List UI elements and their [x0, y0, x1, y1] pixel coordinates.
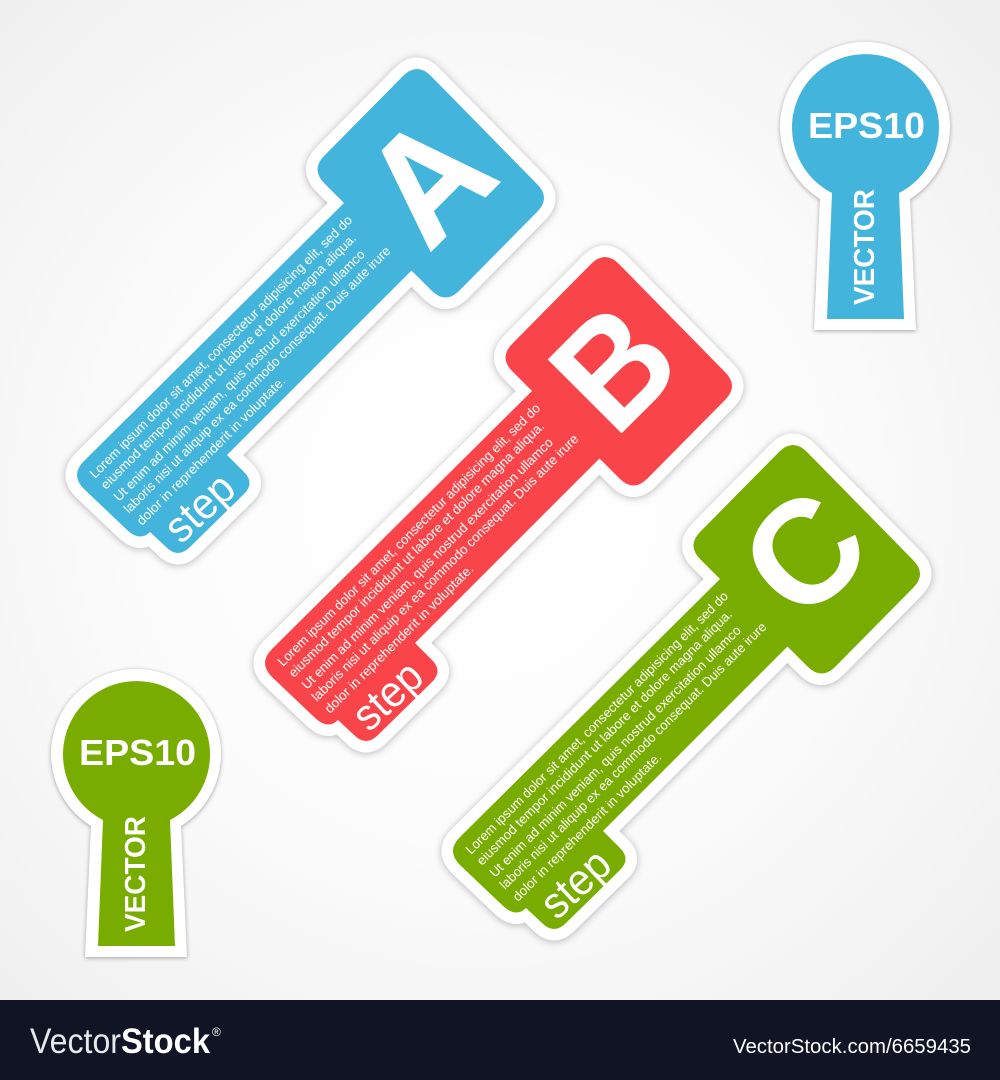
badge label VECTOR: VECTOR — [849, 189, 881, 305]
badge label EPS10: EPS10 — [808, 105, 925, 146]
footer url: VectorStock.com/6659435 — [733, 1036, 971, 1058]
body text B: laboris nisi ut aliquip ex ea commodo consequat. Duis aute irure — [309, 431, 581, 704]
key shape: green — [453, 445, 920, 929]
body text B: Ut enim ad minim veniam, quis nostrud exercitation ullamco — [299, 435, 556, 692]
key panel: step C — [453, 445, 920, 929]
step label C: step — [530, 839, 621, 928]
body text C: dolor in reprehenderit in voluptate. — [510, 749, 664, 904]
badge blue shape — [792, 54, 939, 319]
keyhole badge: blue — [780, 42, 950, 330]
badge white backing — [51, 669, 221, 957]
letter C: C — [709, 458, 900, 649]
body text A: eiusmod tempor incididunt ut labore et dolore magna aliqua. — [98, 230, 359, 492]
body text C: Ut enim ad minim veniam, quis nostrud exercitation ullamco — [487, 623, 744, 880]
footer logo: ® — [212, 1025, 221, 1039]
body text A: laboris nisi ut aliquip ex ea commodo consequat. Duis aute irure — [121, 243, 393, 516]
badge white backing — [780, 42, 950, 330]
footer bar — [0, 1000, 1000, 1080]
body text C: laboris nisi ut aliquip ex ea commodo consequat. Duis aute irure — [497, 619, 769, 892]
key shape: blue — [77, 69, 544, 553]
badge label VECTOR: VECTOR — [120, 816, 152, 932]
body text A: Ut enim ad minim veniam, quis nostrud exercitation ullamco — [111, 247, 368, 504]
step label B: step — [342, 651, 433, 740]
footer logo: VectorStock — [30, 1022, 216, 1061]
body text B: eiusmod tempor incididunt ut labore et dolore magna aliqua. — [286, 418, 547, 680]
badge label EPS10: EPS10 — [79, 732, 196, 773]
letter B: B — [518, 271, 709, 463]
body text C: eiusmod tempor incididunt ut labore et dolore magna aliqua. — [474, 606, 735, 868]
letter A: A — [331, 82, 526, 277]
body text A: Lorem ipsum dolor sit amet, consectetur adipisicing elit, sed do — [87, 212, 355, 481]
keyhole badge: green — [51, 669, 221, 957]
body text C: Lorem ipsum dolor sit amet, consectetur adipisicing elit, sed do — [463, 588, 731, 857]
step label A: step — [154, 463, 245, 552]
key panel: step A — [77, 69, 544, 553]
body text A: dolor in reprehenderit in voluptate. — [134, 373, 288, 528]
body text B: dolor in reprehenderit in voluptate. — [322, 561, 476, 716]
key panel: step B — [265, 257, 732, 741]
key shape: red — [265, 257, 732, 741]
badge green shape — [63, 681, 210, 946]
body text B: Lorem ipsum dolor sit amet, consectetur adipisicing elit, sed do — [275, 400, 543, 669]
